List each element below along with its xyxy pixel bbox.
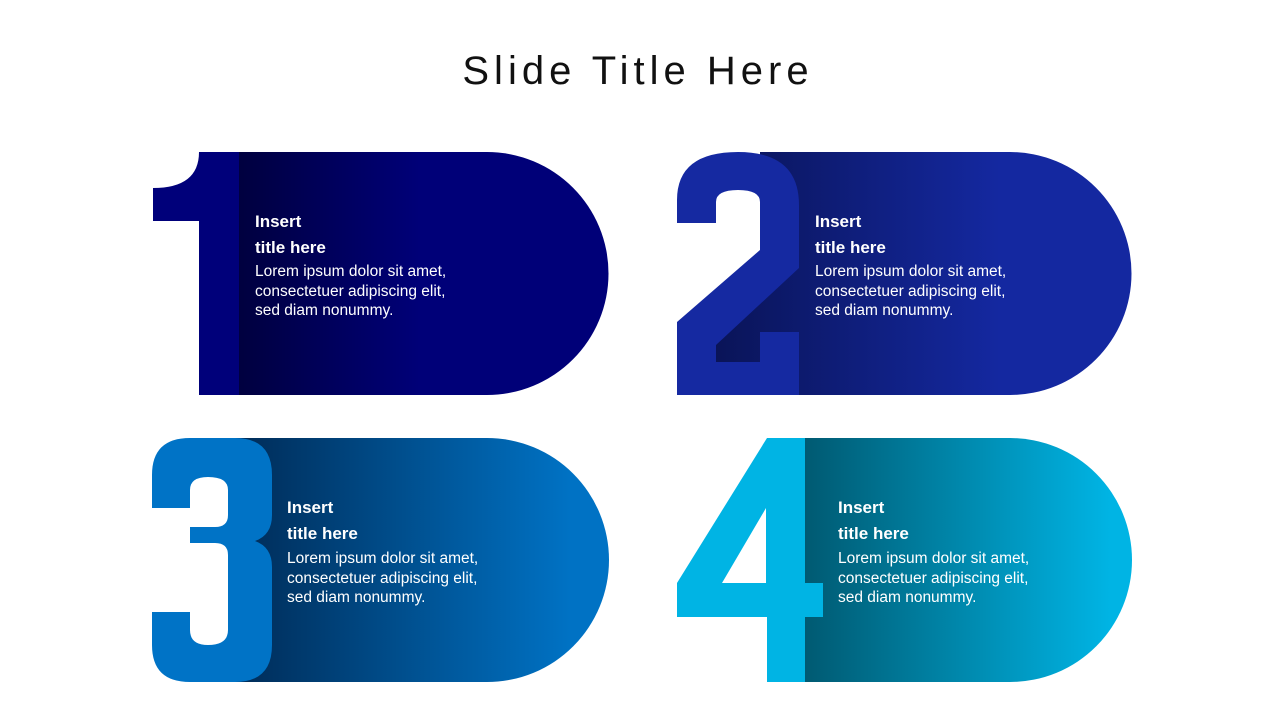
text block 1: consectetuer adipiscing elit, — [255, 283, 445, 300]
panel: card 2 — [677, 152, 1131, 395]
pill 2 — [716, 152, 1131, 395]
panel: card 4 — [677, 438, 1132, 682]
numeral 4 — [677, 438, 823, 682]
text block 2: sed diam nonummy. — [815, 302, 953, 319]
title: Slide Title Here — [462, 49, 814, 93]
pill 4 — [805, 438, 1132, 682]
text block 1: sed diam nonummy. — [255, 302, 393, 319]
text block 4: Lorem ipsum dolor sit amet, — [838, 550, 1029, 567]
text block 1: Lorem ipsum dolor sit amet, — [255, 263, 446, 280]
text block 1: Insert — [255, 212, 302, 231]
numeral 2 — [677, 152, 799, 395]
numeral 3 — [152, 438, 272, 682]
pill 1 — [239, 152, 608, 395]
text block 4: sed diam nonummy. — [838, 589, 976, 606]
text block 3: sed diam nonummy. — [287, 589, 425, 606]
pill 3 — [228, 438, 609, 682]
text block 2: consectetuer adipiscing elit, — [815, 283, 1005, 300]
text block 3 — [287, 498, 478, 606]
text block 3: Insert — [287, 498, 334, 517]
text block 2: Lorem ipsum dolor sit amet, — [815, 263, 1006, 280]
text block 2: Insert — [815, 212, 862, 231]
text block 4: consectetuer adipiscing elit, — [838, 570, 1028, 587]
text block 1 — [255, 212, 446, 319]
text block 2 — [815, 212, 1006, 319]
text block 4: title here — [838, 524, 909, 543]
text block 4: Insert — [838, 498, 885, 517]
text block 2: title here — [815, 238, 886, 257]
panel: card 3 — [152, 438, 609, 682]
numeral 1 — [153, 152, 239, 395]
text block 1: title here — [255, 238, 326, 257]
text block 4 — [838, 498, 1029, 606]
text block 3: title here — [287, 524, 358, 543]
text block 3: Lorem ipsum dolor sit amet, — [287, 550, 478, 567]
panel: card 1 — [153, 152, 608, 395]
text block 3: consectetuer adipiscing elit, — [287, 570, 477, 587]
